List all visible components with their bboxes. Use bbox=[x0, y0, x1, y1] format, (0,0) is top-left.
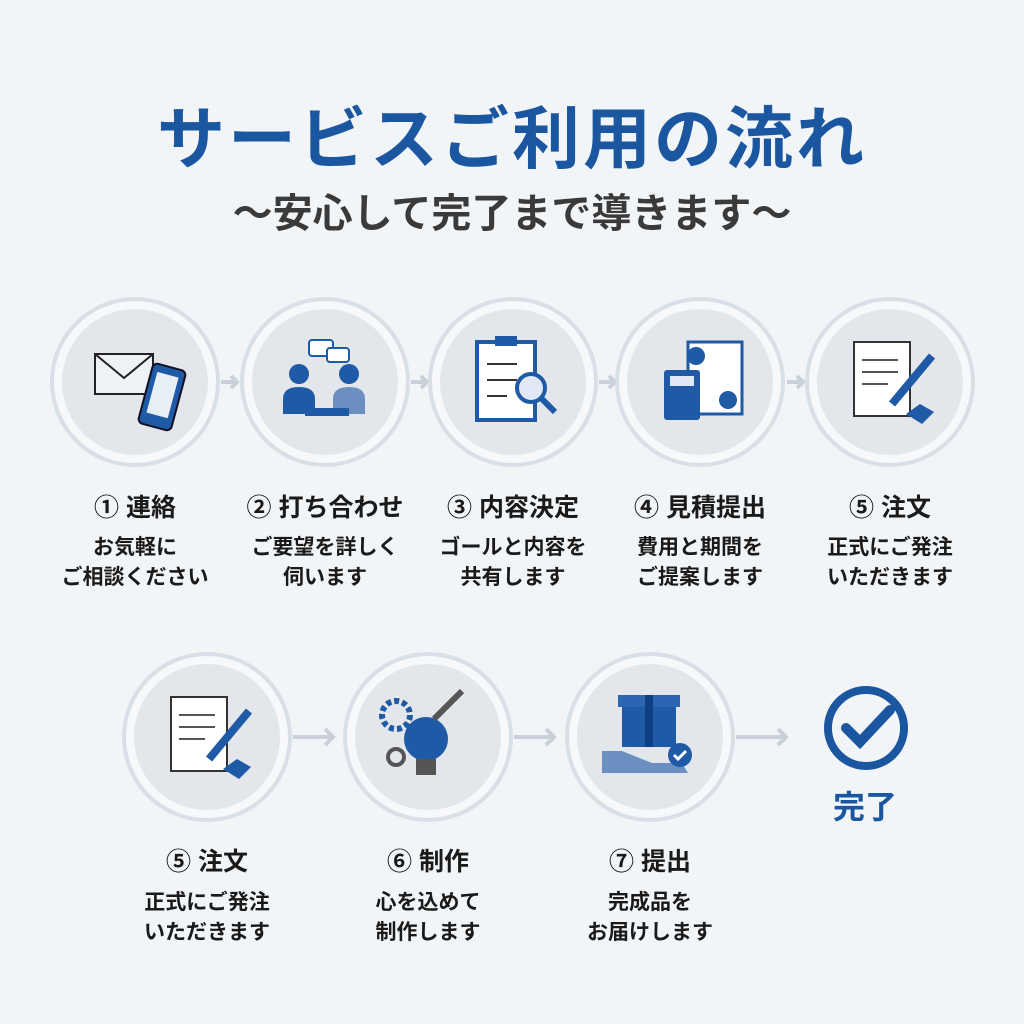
step 1 label: ① 連絡 bbox=[94, 494, 176, 522]
step 5b desc bbox=[144, 890, 270, 944]
step 6 circle bbox=[343, 652, 513, 822]
step 3 desc bbox=[440, 536, 586, 589]
step 1 desc: ご相談ください bbox=[62, 566, 208, 589]
step 2 circle bbox=[240, 297, 410, 467]
step 5b label: ⑤ 注文 bbox=[166, 848, 248, 876]
step 7 desc: 完成品を bbox=[608, 891, 692, 914]
title: サービスご利用の流れ bbox=[157, 102, 867, 178]
step 1 desc: お気軽に bbox=[93, 536, 177, 559]
step 5b desc: いただきます bbox=[144, 921, 270, 944]
step 4 desc bbox=[637, 536, 763, 589]
step 3 circle bbox=[428, 297, 598, 467]
step 4 desc: ご提案します bbox=[637, 566, 763, 589]
step 1 circle bbox=[50, 297, 220, 467]
complete label: 完了 bbox=[833, 789, 897, 825]
step 7 circle bbox=[565, 652, 735, 822]
step 3 label: ③ 内容決定 bbox=[447, 494, 579, 522]
step 5 desc: いただきます bbox=[827, 566, 953, 589]
step 4 label: ④ 見積提出 bbox=[634, 494, 766, 522]
step 2 label: ② 打ち合わせ bbox=[247, 494, 403, 522]
step 5b circle bbox=[122, 652, 292, 822]
step 5 desc: 正式にご発注 bbox=[827, 536, 953, 559]
step 4 desc: 費用と期間を bbox=[637, 536, 763, 559]
step 5 label: ⑤ 注文 bbox=[849, 494, 931, 522]
step 2 desc: ご要望を詳しく bbox=[252, 536, 398, 559]
step 1 desc bbox=[62, 536, 208, 589]
step 6 desc: 制作します bbox=[376, 921, 480, 944]
step 5 desc bbox=[827, 536, 953, 589]
step 7 desc: お届けします bbox=[587, 921, 713, 944]
step 3 desc: 共有します bbox=[460, 566, 566, 589]
step 6 label: ⑥ 制作 bbox=[387, 848, 469, 876]
step 5 circle bbox=[805, 297, 975, 467]
step 3 desc: ゴールと内容を bbox=[440, 536, 586, 559]
subtitle: ～安心して完了まで導きます～ bbox=[233, 192, 791, 236]
step 6 desc bbox=[376, 891, 480, 944]
step 2 desc bbox=[252, 536, 398, 589]
step 4 circle bbox=[615, 297, 785, 467]
step 6 desc: 心を込めて bbox=[376, 891, 480, 914]
step 5b desc: 正式にご発注 bbox=[144, 891, 270, 914]
step 7 label: ⑦ 提出 bbox=[609, 848, 691, 876]
icon: complete check bbox=[824, 686, 908, 770]
step 7 desc bbox=[587, 890, 713, 944]
step 2 desc: 伺います bbox=[283, 566, 367, 589]
